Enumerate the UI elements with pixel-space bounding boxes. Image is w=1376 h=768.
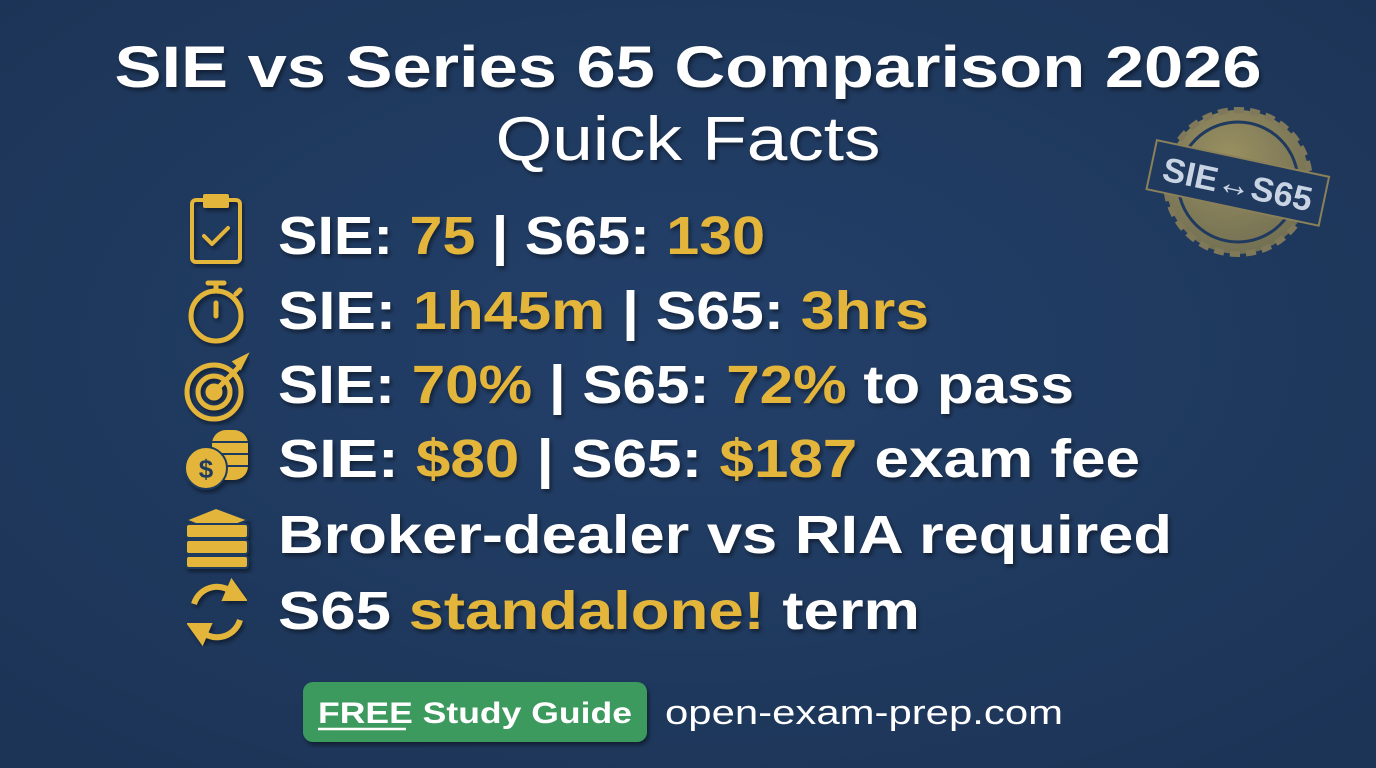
row: time: SIE: 1h45m | S65: 3hrs [278,281,929,342]
row: requirement: Broker-dealer vs RIA required [278,505,1172,565]
subtitle: Quick Facts [496,105,880,174]
title: SIE vs Series 65 Comparison 2026 [114,35,1262,100]
row: standalone: S65 standalone! term [278,581,920,641]
button: free study guide: FREE Study Guide [318,697,632,730]
footer url: open-exam-prep.com [665,694,1063,732]
icon: coins: $ [199,454,214,484]
row: pass score: SIE: 70% | S65: 72% to pass [278,355,1074,416]
icon: target [187,358,244,419]
row: question count: SIE: 75 | S65: 130 [278,206,765,267]
badge: SIE↔S65 [1137,93,1339,271]
icon: coins [185,430,248,489]
icon: books [186,508,248,568]
fact rows [278,206,1172,641]
badge: SIE↔S65: SIE↔S65 [1159,151,1316,219]
button: free study guide [303,682,647,742]
icon: refresh [192,584,242,640]
icon: clipboard [192,196,240,262]
row: fee: SIE: $80 | S65: $187 exam fee [278,429,1140,490]
icon: stopwatch [191,283,241,341]
